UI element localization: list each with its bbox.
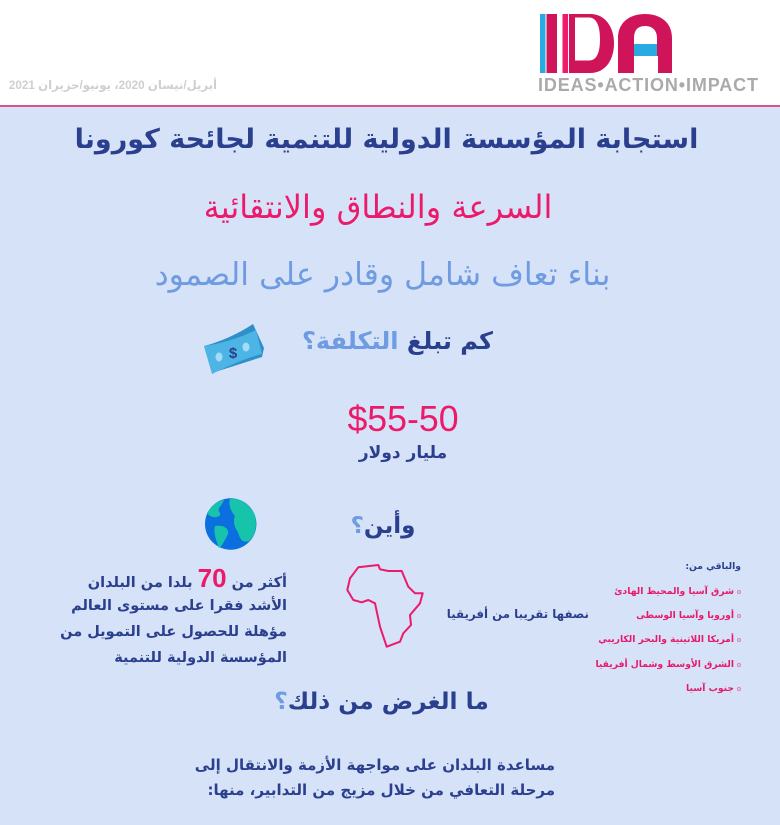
text: more than 70 countries — [60, 563, 287, 666]
icon: banknote — [204, 324, 264, 374]
text: purpose description: مساعدة البلدان على مواجهة الأزمة والانتقال إلى — [195, 756, 555, 774]
heading: where: وأين؟ — [351, 513, 415, 539]
heading: what is the purpose: ما الغرض من ذلك؟ — [274, 688, 489, 715]
list item: Latin America and Caribbean: أمريكا اللاتينية والبحر الكاريبي — [598, 634, 734, 645]
logo: IDA: IDEAS•ACTION•IMPACT — [538, 75, 758, 95]
list item: East Asia and Pacific: شرق آسيا والمحيط الهادئ — [614, 586, 734, 597]
text: purpose description: مرحلة التعافي من خلال مزيج من التدابير، منها: — [208, 781, 555, 799]
icon: globe — [205, 498, 256, 550]
text: more than 70 countries: المؤسسة الدولية للتنمية — [114, 650, 287, 666]
logo: IDA — [538, 14, 758, 95]
figure: cost: $55-50 — [347, 399, 459, 439]
heading: how much does it cost: كم تبلغ التكلفة؟ — [302, 327, 493, 355]
list item: Middle East and North Africa: الشرق الأوسط وشمال أفريقيا — [595, 659, 734, 670]
date line: أبريل/نيسان 2020، يونيو/حزيران 2021 — [9, 79, 217, 92]
label: billion dollars: مليار دولار — [359, 443, 447, 463]
list item: South Asia: جنوب آسيا — [686, 683, 734, 694]
list heading: والباقي من: — [685, 561, 741, 572]
text: about half in Africa: نصفها تقريبا من أفريقيا — [447, 607, 589, 621]
list: remaining regions — [595, 561, 741, 694]
text: purpose description — [195, 756, 555, 799]
text: more than 70 countries: الأشد فقرا على مستوى العالم — [71, 598, 287, 614]
list item: Europe and Central Asia: أوروبا وآسيا الوسطى — [636, 610, 734, 621]
icon: banknote: $ — [229, 345, 238, 362]
text: more than 70 countries: أكثر من 70 بلدا من البلدان — [88, 563, 287, 593]
subtitle: speed, scale, selectivity: السرعة والنطاق والانتقائية — [204, 188, 552, 226]
text: more than 70 countries: مؤهلة للحصول على التمويل من — [60, 624, 287, 640]
map: Africa outline — [346, 564, 424, 648]
subtitle: inclusive resilient recovery: بناء تعاف شامل وقادر على الصمود — [155, 257, 610, 293]
title: استجابة المؤسسة الدولية للتنمية لجائحة كورونا — [75, 124, 698, 155]
